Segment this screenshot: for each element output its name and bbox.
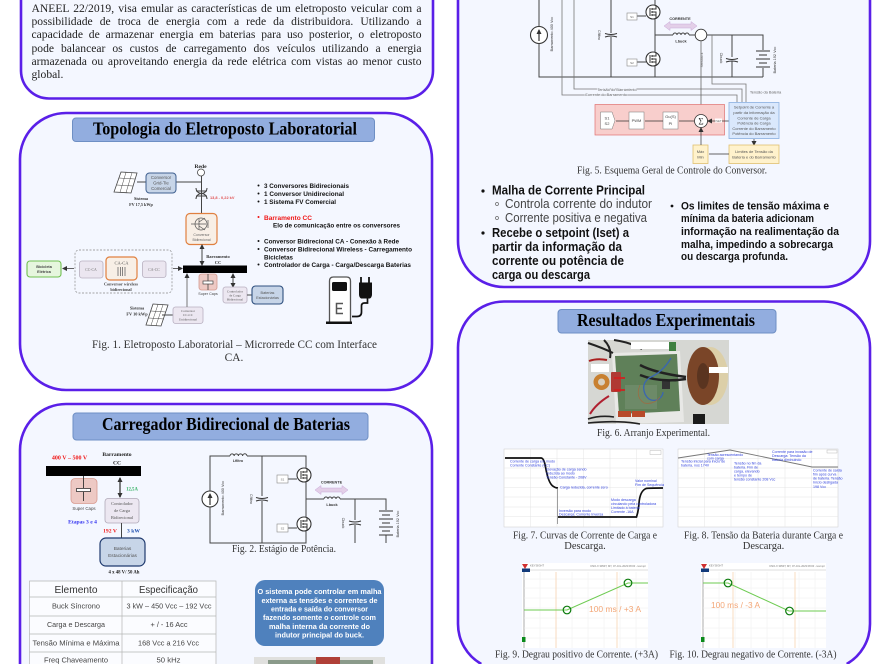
control loop: red block: S1: [605, 116, 610, 120]
box: bidirectional charge controller: Controlador: [111, 501, 133, 506]
box: wireless bidirectional converter: bidirecional: [110, 287, 133, 292]
box: bidirectional converter: [186, 214, 217, 244]
diagram: microgrid: Sistema: [130, 306, 145, 310]
caption: figure 2: Fig. 2. Estágio de Potência.: [232, 544, 336, 555]
chart: load current curves: Carga reduzida, corrente zero: [560, 486, 608, 490]
callout: control description: externa as tensões e correntes de: [262, 596, 378, 605]
box: super caps: [198, 274, 218, 296]
bullet list: conversores: Barramento CC: [264, 215, 312, 222]
table: specifications: Elemento: [54, 584, 98, 596]
diagram: microgrid: Barramento: [206, 254, 230, 259]
bullet list: voltage limits: [671, 200, 840, 263]
chart: positive current step: KEYSIGHT: [530, 564, 544, 568]
diagram: control scheme: Sensibuck: [700, 52, 704, 67]
caption: figure 7: Descarga.: [564, 541, 606, 552]
diagram: microgrid: Sistema: [134, 196, 149, 201]
chart: battery voltage: tensão constante 208 Vcc: [734, 478, 776, 482]
bullet list: voltage limits: informação na realimentação da: [681, 226, 840, 238]
box: voltage limits: [729, 145, 779, 164]
callout: control description: fazendo somente o controle com: [263, 613, 376, 622]
bullet list: main current loop: Corrente positiva e negativa: [505, 211, 647, 225]
bullet list: conversores: Elo de comunicação entre os conversores: [273, 222, 400, 230]
callout: control description: [255, 580, 384, 646]
bullet list: conversores: Conversor Bidirecional Wireless - Carregamento: [264, 246, 412, 254]
chart: negative current step: KEYSIGHT: [709, 564, 723, 568]
chart: negative current step: [701, 563, 826, 648]
photo: experimental setup: [588, 340, 729, 424]
box: wireless bidirectional converter: CA-CA: [114, 260, 129, 266]
chart: load current curves: reduzida ao modo: [546, 472, 575, 476]
chart: battery voltage: Corrente de saída: [813, 468, 842, 472]
diagram: microgrid: [27, 164, 283, 326]
bullet list: voltage limits: malha, impedindo a sobrecarga: [681, 239, 834, 251]
panel: Resultados Experimentais: [458, 302, 870, 664]
chart: battery voltage: Corrente para invasão de: [772, 450, 813, 454]
text block: introduction paragraph: armazenada ou aproveitando energia da rede elétrica com vistas ao menor custo: [32, 55, 422, 68]
box: DC-DC unidirectional converter: Conversor: [181, 309, 196, 313]
icon: mosfet S1: [277, 468, 311, 483]
caption: figure 8: [684, 530, 843, 552]
callout: control description: entrada e saída do conversor: [271, 604, 368, 614]
bullet list: voltage limits: mínima da bateria adicionam: [681, 213, 814, 225]
chart: battery voltage: Início desligada: [813, 480, 838, 484]
heading: carregador: Carregador Bidirecional de Baterias: [102, 414, 350, 434]
bullet list: main current loop: [481, 184, 652, 282]
box: grid-tie converter: Grid-Tie: [153, 180, 169, 186]
circuit: power stage: Bateria 192 Vcc: [396, 511, 400, 537]
bullet list: voltage limits: Os limites de tensão máxima e: [681, 200, 829, 212]
box: setpoint: partir da informação da: [733, 110, 775, 115]
text block: introduction paragraph: pode balancear os custos de carregamento dos veículos utilizando a energia: [32, 42, 422, 55]
chart: battery voltage: fim após curva: [813, 472, 836, 476]
heading: carregador: [73, 413, 368, 440]
bullet list: conversores: 3 Conversores Bidirecionais: [264, 183, 349, 190]
control loop: red block: ISET: [715, 119, 722, 123]
text block: introduction paragraph: [32, 0, 422, 84]
caption: figure 7: Fig. 7. Curvas de Corrente de Carga e: [513, 530, 657, 542]
icon: PV array 10 kWp: [146, 304, 168, 326]
box: setpoint: Potência do Barramento: [732, 131, 776, 136]
chart: load current curves: Fim de Sequência: [635, 483, 664, 487]
chart: load current curves: Elevação de carga sendo: [546, 468, 587, 472]
caption: figure 8: Descarga.: [743, 541, 784, 552]
box: charge controller: de Carga: [229, 294, 241, 298]
icon: mosfet S2: S2: [281, 526, 285, 530]
bullet list: voltage limits: ou descarga profunda.: [681, 251, 788, 263]
box: setpoint: Corrente de Carga: [737, 115, 771, 120]
box: voltage limits: Limites de Tensão da: [735, 149, 774, 154]
diagram: charger stage: 12,5A: [126, 488, 138, 492]
box: max min: Min: [697, 154, 704, 160]
box: max min: Máx: [697, 149, 704, 154]
bullet list: main current loop: corrente ou potência de: [492, 254, 624, 268]
caption: figure 6: Fig. 6. Arranjo Experimental.: [597, 428, 710, 439]
text block: introduction paragraph: capacidade de armazenar energia em baterias para uso posterior, o eletroposto: [32, 28, 422, 41]
chart: battery voltage: Tensão acrescentando: [707, 453, 743, 457]
panel: Topologia do Eletroposto Laboratorial: [20, 113, 432, 390]
diagram: charger stage: 3 kW: [127, 528, 140, 534]
diagram: charger stage: 192 V: [103, 528, 117, 534]
box: stationary batteries: [100, 538, 145, 566]
arrow: current: [315, 486, 348, 494]
photo: converter board: [254, 657, 385, 664]
box: DC-DC unidirectional converter: CC-CC: [183, 313, 194, 317]
chart: positive current step: DSO-X 3054T, MY, 07-JUL-2023 08:00 - test spr: [591, 564, 646, 568]
caption: figure 10: Fig. 10. Degrau negativo de Corrente. (-3A): [670, 650, 837, 660]
bullet list: main current loop: Controla corrente do indutor: [505, 197, 652, 211]
box: wireless bidirectional converter: Conversor wireless: [104, 282, 138, 286]
diagram: charger stage: Etapas 3 e 4: [68, 520, 97, 526]
chart: battery voltage: com carga: [707, 456, 724, 460]
box: electric bicycle: [27, 261, 61, 277]
caption: figure 8: Fig. 8. Tensão da Bateria durante Carga e: [684, 530, 843, 542]
box: super caps: Super Caps: [198, 292, 218, 296]
box: stationary batteries: Estacionárias: [108, 553, 137, 559]
box: wireless bidirectional converter: CA-CC: [148, 268, 160, 272]
callout: control description: O sistema pode controlar em malha: [258, 587, 382, 596]
box: stationary batteries: Baterias: [261, 291, 275, 295]
bullet list: main current loop: Recebe o setpoint (Iset) a: [492, 226, 630, 240]
circuit: power stage: CORRENTE: [321, 480, 343, 484]
chart: load current curves: Corrente Constante (CC): [510, 464, 550, 468]
caption: figure 1: Fig. 1. Eletroposto Laboratorial – Microrrede CC com Interface: [92, 339, 377, 351]
icon: current source: [202, 491, 218, 507]
icon: charging station: [326, 277, 372, 324]
box: grid-tie converter: Conversor: [151, 175, 172, 180]
caption: figure 7: [513, 530, 657, 552]
box: stationary batteries: [252, 286, 283, 304]
bullet list: conversores: Conversor Bidirecional CA - Conexão à Rede: [264, 238, 399, 246]
chart: load current curves: Limitado à bateria: [611, 506, 640, 510]
diagram: control scheme: Tensão da Bateria: [750, 90, 782, 94]
control loop: red block: PI: [669, 121, 672, 126]
icon: mosfet S1: S1: [630, 15, 634, 19]
circuit: power stage: [202, 454, 400, 543]
toroid inductor: [687, 347, 728, 405]
diagram: control scheme: Cbuck: [719, 53, 723, 63]
box: bidirectional converter: Conversor: [193, 233, 210, 237]
chart: load current curves: [504, 449, 664, 527]
box: DC-DC unidirectional converter: Unidirecional: [179, 318, 197, 322]
diagram: control scheme: Corrente do Barramento: [585, 92, 627, 97]
box: super caps: Super Caps: [72, 506, 96, 511]
chart: positive current step: [522, 563, 648, 648]
chart: battery voltage: bateria, nos 174V: [681, 464, 710, 468]
caption: figure 9: Fig. 9. Degrau positivo de Corrente. (+3A): [495, 650, 658, 660]
diagram: charger stage: 400 V – 500 V: [52, 456, 88, 462]
table: specifications: Carga e Descarga: [47, 620, 106, 629]
chart: battery voltage: [678, 449, 843, 527]
icon: PV array 17.5 kWp: [114, 172, 137, 193]
box: bidirectional charge controller: [105, 498, 139, 523]
bullet list: main current loop: Malha de Corrente Principal: [492, 184, 645, 198]
control loop: red block: S2: [605, 121, 610, 126]
diagram: control scheme: Barramento 400 Vcc: [550, 17, 554, 51]
icon: transformer: [196, 176, 207, 213]
chart: load current curves: Tensão Constante - 208V: [546, 476, 587, 480]
control loop: red block: PWM: [632, 118, 641, 123]
box: charge controller: [223, 287, 247, 303]
box: grid-tie converter: [146, 173, 176, 193]
circuit: power stage: Cfiltro: [249, 494, 253, 504]
box: charge controller: Controlador: [227, 290, 244, 294]
box: stationary batteries: Estacionárias: [256, 296, 279, 300]
text block: introduction paragraph: ANEEL 22/2019, visa emular as características de um eletroposto veicular com a: [32, 2, 422, 14]
heading: topologia: Topologia do Eletroposto Laboratorial: [93, 118, 357, 138]
chart: battery voltage: bateria diminuindo: [772, 458, 801, 462]
table: specifications: Especificação: [139, 584, 198, 596]
chart: battery voltage: Tensão inicial para início de: [681, 460, 725, 464]
circuit: power stage: Cbuck: [341, 518, 345, 528]
chart: battery voltage: carga, elevando: [734, 470, 760, 474]
box: bidirectional charge controller: Bidirecional: [111, 515, 134, 520]
bullet list: conversores: 1 Sistema FV Comercial: [264, 199, 336, 206]
panel: Controle do conversor: [458, 0, 870, 287]
table: specifications: [30, 581, 216, 664]
heading: resultados: Resultados Experimentais: [577, 310, 755, 330]
chart: negative current step: DSO-X 3054T, MY, 07-JUL-2023 08:00 - test spr: [770, 564, 825, 568]
box: bidirectional converter: Bidirecional: [192, 238, 211, 242]
diagram: microgrid: FV 17,5 kWp: [129, 202, 154, 207]
callout: control description: indutor principal do buck.: [275, 630, 364, 640]
bullet list: main current loop: partir da informação da: [492, 240, 623, 254]
box: setpoint: [729, 102, 779, 138]
table: specifications: 168 Vcc a 216 Vcc: [138, 638, 199, 648]
DC bus: [183, 266, 247, 273]
bullet list: conversores: Bicicletas: [264, 254, 293, 262]
box: setpoint: Setpoint de Corrente a: [734, 104, 775, 110]
diagram: microgrid: CC: [215, 260, 221, 265]
bullet list: conversores: [258, 183, 412, 269]
diagram: control scheme: CORRENTE: [669, 17, 691, 21]
chart: battery voltage: e tempo de: [734, 474, 752, 478]
diagram: charger stage: [46, 452, 145, 576]
box: grid-tie converter: Comercial: [151, 186, 171, 191]
circuit: power stage: Lbuck: [326, 503, 338, 507]
arrow: current: [664, 22, 697, 30]
box: wireless bidirectional converter: [75, 250, 172, 293]
icon: mosfet S2: S2: [630, 61, 634, 65]
panel: introduction: [21, 0, 433, 98]
caption: figure 1: [92, 339, 377, 364]
diagram: control scheme: Lbuck: [675, 40, 687, 44]
diagram: control scheme: Tensão do Barramento: [597, 87, 637, 92]
icon: current sensor: [695, 29, 707, 41]
caption: figure 1: CA.: [225, 352, 243, 364]
diagram: charger stage: CC: [113, 460, 121, 466]
diagram: microgrid: 13,8 - 0,22 kV: [210, 195, 235, 200]
chart: battery voltage: bateria. Fim de: [734, 466, 758, 470]
chart: negative current step: 100 ms / -3 A: [711, 601, 761, 610]
table: specifications: + / - 16 Acc: [150, 620, 188, 629]
icon: current source: [530, 26, 548, 44]
panel: Carregador Bidirecional de Baterias: [20, 404, 432, 664]
box: wireless bidirectional converter: CC-CA: [85, 268, 97, 272]
chart: load current curves: circulando pela controladora: [611, 502, 656, 506]
circuit: power stage: Barramento 400 Vcc: [221, 481, 225, 515]
icon: mosfet S2: [627, 52, 660, 66]
icon: mosfet S1: [627, 5, 660, 20]
callout: control description: malha interna da corrente do: [269, 622, 370, 631]
diagram: microgrid: Rede: [194, 164, 207, 170]
diagram: charger stage: 4 x 48 V/ 50 Ah: [109, 570, 140, 576]
diagram: microgrid: FV 10 kWp: [126, 312, 148, 316]
icon: mosfet S2: [277, 517, 311, 532]
control loop: red block: Gu(S): [665, 114, 676, 119]
bullet list: conversores: 1 Conversor Unidirecional: [264, 191, 344, 198]
chart: positive current step: 100 ms / +3 A: [589, 605, 642, 614]
box: bidirectional charge controller: de Carga: [114, 508, 130, 513]
chart: battery voltage: 198 Vcc: [813, 485, 826, 489]
table: specifications: 3 kW – 450 Vcc – 192 Vcc: [126, 602, 212, 610]
chart: load current curves: Descarga: Corrente Inversa: [559, 512, 603, 516]
chart: battery voltage: de bateria. Tensão: [813, 476, 843, 480]
box: setpoint: Potência de Carga: [737, 120, 771, 126]
chart: battery voltage: Descarga: Tensão da: [772, 454, 806, 458]
chart: load current curves: Corrente -16A: [611, 510, 634, 514]
box: DC-DC unidirectional converter: [173, 307, 203, 324]
control loop: red block: [595, 104, 729, 135]
table: specifications: Tensão Mínima e Máxima: [32, 638, 120, 648]
box: charge controller: Bidirecional: [227, 298, 243, 302]
box: setpoint: Corrente do Barramento: [732, 126, 776, 131]
text block: introduction paragraph: possibilidade de troca de energia com a rede da distribuidora. Utilizando a: [32, 15, 422, 28]
bullet list: main current loop: carga ou descarga: [492, 268, 591, 282]
box: max min: [693, 145, 708, 164]
chart: load current curves: Inversão para modo: [559, 509, 591, 513]
icon: mosfet S1: S1: [281, 478, 285, 482]
caption: figure 5: Fig. 5. Esquema Geral de Controle do Conversor.: [577, 166, 767, 176]
text block: introduction paragraph: global.: [32, 68, 63, 81]
chart: load current curves: Corrente de carga em modo: [510, 460, 555, 464]
chart: battery voltage: Tensão no fim da: [734, 462, 761, 466]
box: electric bicycle: Bicicleta: [36, 265, 53, 269]
bullet list: conversores: Controlador de Carga - Carga/Descarga Baterias: [264, 262, 411, 269]
box: electric bicycle: Elétrica: [37, 270, 52, 274]
diagram: control scheme: [530, 0, 782, 164]
table: specifications: Buck Síncrono: [52, 602, 100, 610]
chart: load current curves: Modo descarga: [611, 498, 636, 502]
box: stationary batteries: Baterias: [114, 546, 132, 552]
box: voltage limits: Bateria e do Barramento: [732, 154, 777, 160]
diagram: control scheme: Bateria 192 Vcc: [773, 47, 777, 73]
control loop: red block: Σ: [698, 116, 704, 126]
chart: load current curves: Valor nominal: [635, 479, 657, 483]
circuit: power stage: Lfiltro: [233, 459, 244, 463]
diagram: charger stage: Barramento: [102, 452, 132, 458]
diagram: control scheme: Cfiltro: [597, 30, 601, 40]
